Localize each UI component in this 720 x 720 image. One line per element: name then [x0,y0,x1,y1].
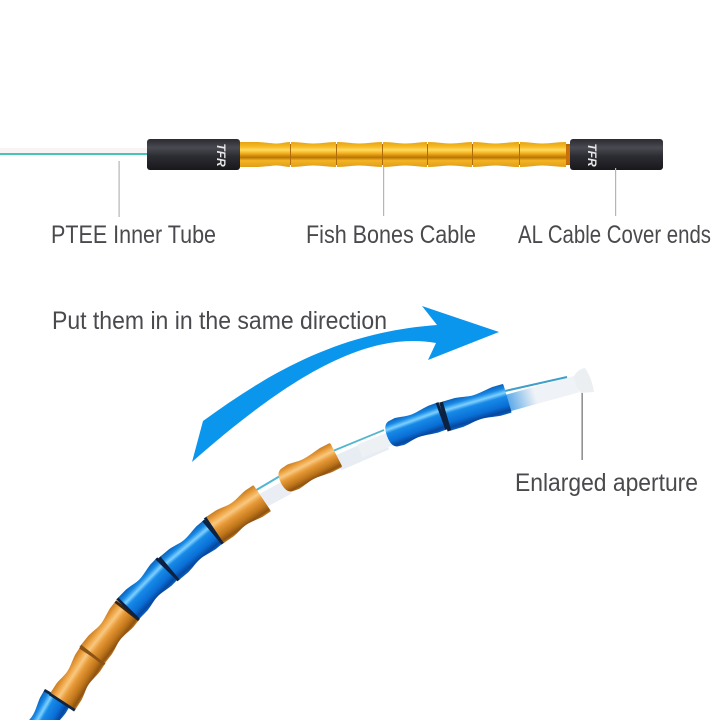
orange segment [49,647,106,711]
leader line: enlarged aperture [582,393,583,460]
orange segment [204,485,271,545]
blue segment [116,557,179,620]
blue segment, loose [439,384,512,431]
label: Enlarged aperture: Enlarged aperture [515,469,698,497]
orange segment [79,600,140,666]
label: Fish Bones Cable: Fish Bones Cable [306,221,476,249]
blue segment [17,689,71,720]
blue segment, loose [382,402,448,449]
left black cable cover end [147,139,240,170]
PTFE tube, curved [253,377,577,501]
left black cable cover end: TFR [214,143,228,167]
label: PTEE Inner Tube: PTEE Inner Tube [51,221,216,249]
heading: direction note: Put them in in the same direction [52,307,387,335]
tube flared end [574,368,594,393]
right black cable cover end: TFR [585,143,599,167]
gold fish bone segments [240,142,572,167]
leader line: PTEE inner tube [118,161,120,217]
panel: curved cable assembly [17,368,594,720]
arrow: curved blue direction arrow [192,306,499,462]
leader line: cover ends [615,168,616,216]
PTFE inner tube, straight [0,148,147,155]
panel: straight cable assembly [0,139,663,170]
leader line: fish bones cable [383,167,384,216]
right black cable cover end [570,139,663,170]
blue segment [158,520,224,581]
orange segment, loose [275,443,342,495]
